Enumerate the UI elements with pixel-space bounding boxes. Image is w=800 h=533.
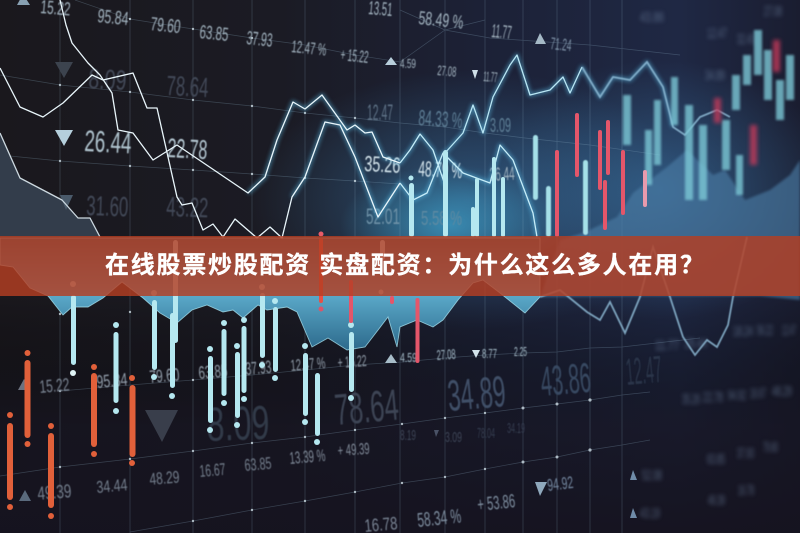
numeric labels: sharp foreground: 63.85 bbox=[244, 454, 272, 475]
numeric labels: sharp foreground: 34.44 bbox=[96, 475, 128, 497]
numeric labels: dim large: 34.89 bbox=[446, 367, 508, 421]
numeric labels: blurred far right: 94.92 bbox=[728, 387, 746, 404]
numeric labels: sharp foreground: 79.60 bbox=[149, 364, 180, 387]
numeric labels: blurred far right: 18.24 bbox=[733, 323, 753, 340]
numeric labels: blurred far right bbox=[640, 3, 796, 522]
numeric labels: blurred far right: 37.93 bbox=[737, 445, 754, 462]
numeric labels: sharp foreground: 95.84 bbox=[96, 6, 130, 30]
numeric labels: sharp foreground: 35.26 bbox=[364, 151, 401, 178]
numeric labels: sharp foreground: 4.59 bbox=[400, 350, 417, 365]
numeric labels: sharp foreground: 63.85 bbox=[198, 22, 230, 46]
numeric labels: sharp foreground: 48.79 % bbox=[418, 156, 463, 183]
numeric labels: blurred far right: 12.47 bbox=[707, 25, 727, 42]
numeric labels: sharp foreground: 37.93 bbox=[245, 357, 272, 379]
numeric labels: sharp foreground: + 15.22 bbox=[340, 45, 369, 67]
numeric labels: blurred far right: 49.39 bbox=[708, 492, 725, 509]
numeric labels: sharp foreground: 12.47 % bbox=[291, 37, 327, 60]
numeric labels: blurred far right: 43.19 bbox=[640, 505, 660, 522]
numeric labels: blurred far right: 79.60 bbox=[763, 439, 778, 456]
area chart: central blue bbox=[0, 238, 540, 350]
numeric labels: sharp foreground: 22.78 bbox=[167, 133, 208, 165]
line series: white trend lines bbox=[0, 0, 582, 238]
line series: glow bbox=[248, 55, 673, 237]
numeric labels: sharp foreground: + 49.39 bbox=[337, 441, 370, 460]
candlesticks: blurred red bbox=[714, 40, 780, 165]
numeric labels: sharp foreground: 94.92 bbox=[546, 473, 574, 495]
triangle markers bbox=[17, 0, 637, 518]
numeric labels: blurred far right: 11.77 bbox=[655, 337, 679, 354]
numeric labels: dim large: 43.22 bbox=[166, 191, 209, 223]
numeric labels: blurred far right: 63.85 bbox=[707, 451, 725, 468]
numeric labels: dim large: 31.60 bbox=[86, 190, 129, 222]
numeric labels: sharp foreground: 26.44 bbox=[489, 164, 515, 186]
candlesticks: blurred cyan bbox=[623, 30, 794, 200]
numeric labels: sharp foreground: 95.84 bbox=[96, 369, 128, 392]
numeric labels: blurred far right: 32.45 bbox=[737, 31, 755, 48]
numeric labels: sharp foreground bbox=[37, 0, 574, 533]
candlesticks: red bbox=[318, 113, 647, 363]
numeric labels: dim large: 3.09 bbox=[445, 429, 462, 446]
numeric labels: blurred far right: 26.44 bbox=[685, 335, 707, 352]
numeric labels: dim large: 52.01 bbox=[366, 204, 400, 229]
numeric labels: sharp foreground: 37.93 bbox=[245, 28, 274, 52]
numeric labels: dim large: 34.19 bbox=[507, 420, 525, 437]
line series: blurred right bbox=[540, 62, 747, 355]
numeric labels: sharp foreground: 27.08 bbox=[437, 62, 457, 80]
numeric labels: blurred far right: 56.22 bbox=[757, 322, 773, 339]
candlesticks: sharp cyan bbox=[70, 150, 505, 445]
numeric labels: dim large: 8.09 bbox=[88, 63, 127, 96]
background financial chart scene: 12.47 bbox=[624, 349, 664, 394]
candlesticks: soft cyan mid-depth bbox=[533, 135, 588, 237]
numeric labels: sharp foreground: 63.85 bbox=[198, 361, 228, 383]
numeric labels: blurred far right: 43.86 bbox=[640, 9, 664, 26]
numeric labels: dim large: 84.33 % bbox=[418, 105, 463, 133]
numeric labels: sharp foreground: 4.59 bbox=[400, 56, 416, 71]
numeric labels: blurred far right: 16.67 bbox=[750, 385, 766, 402]
numeric labels: dim large: 8.09 bbox=[206, 397, 270, 452]
numeric labels: dim large bbox=[86, 63, 664, 452]
numeric labels: dim large: 43.86 bbox=[539, 354, 593, 405]
numeric labels: sharp foreground: 26.44 bbox=[84, 125, 132, 160]
numeric labels: blurred far right: 52.08 bbox=[642, 467, 662, 484]
numeric labels: sharp foreground: 79.60 bbox=[149, 14, 182, 38]
numeric labels: blurred far right: 35.26 bbox=[682, 391, 700, 408]
title banner bbox=[0, 236, 800, 296]
grid dots bbox=[59, 18, 592, 522]
numeric labels: dim large: 78.64 bbox=[333, 381, 401, 435]
numeric labels: blurred far right: 22.78 bbox=[703, 389, 723, 406]
candlesticks: orange bbox=[7, 350, 136, 519]
numeric labels: sharp foreground: 16.67 bbox=[199, 460, 226, 481]
numeric labels: sharp foreground: + 53.86 bbox=[476, 491, 516, 516]
title: 在线股票炒股配资 实盘配资：为什么这么多人在用？ bbox=[105, 252, 706, 279]
numeric labels: sharp foreground: 27.08 bbox=[436, 346, 456, 363]
numeric labels: blurred far right: 16.78 bbox=[738, 482, 754, 499]
numeric labels: sharp foreground: 11.77 bbox=[490, 21, 513, 44]
numeric labels: sharp foreground: 12.47 % bbox=[290, 355, 326, 375]
numeric labels: dim large: 3.09 bbox=[490, 115, 511, 137]
numeric labels: sharp foreground: 15.22 bbox=[39, 374, 70, 397]
numeric labels: sharp foreground: 13.39 % bbox=[289, 446, 326, 468]
numeric labels: dim large: 8.19 bbox=[400, 427, 416, 444]
area chart: right blurred blue bbox=[540, 150, 800, 300]
numeric labels: sharp foreground: 58.34 % bbox=[416, 505, 462, 532]
numeric labels: sharp foreground: 2.25 bbox=[514, 344, 527, 359]
numeric labels: dim large: 5.58 % bbox=[421, 208, 462, 230]
numeric labels: sharp foreground: 49.39 bbox=[37, 481, 72, 505]
numeric labels: sharp foreground: 71.24 bbox=[550, 34, 572, 55]
numeric labels: blurred far right: 34.89 bbox=[705, 67, 725, 84]
numeric labels: dim large: 78.64 bbox=[166, 70, 209, 103]
numeric labels: sharp foreground: + 15.22 bbox=[337, 353, 367, 372]
area chart: left slate bbox=[0, 133, 100, 237]
numeric labels: sharp foreground: 8.77 bbox=[482, 346, 497, 361]
numeric labels: dim large: 78.04 bbox=[477, 425, 495, 442]
numeric labels: sharp foreground: 48.29 bbox=[149, 467, 180, 489]
numeric labels: sharp foreground: 58.49 % bbox=[417, 8, 464, 34]
numeric labels: sharp foreground: 11.77 bbox=[483, 68, 498, 85]
numeric labels: dim large: 12.47 bbox=[367, 100, 393, 125]
